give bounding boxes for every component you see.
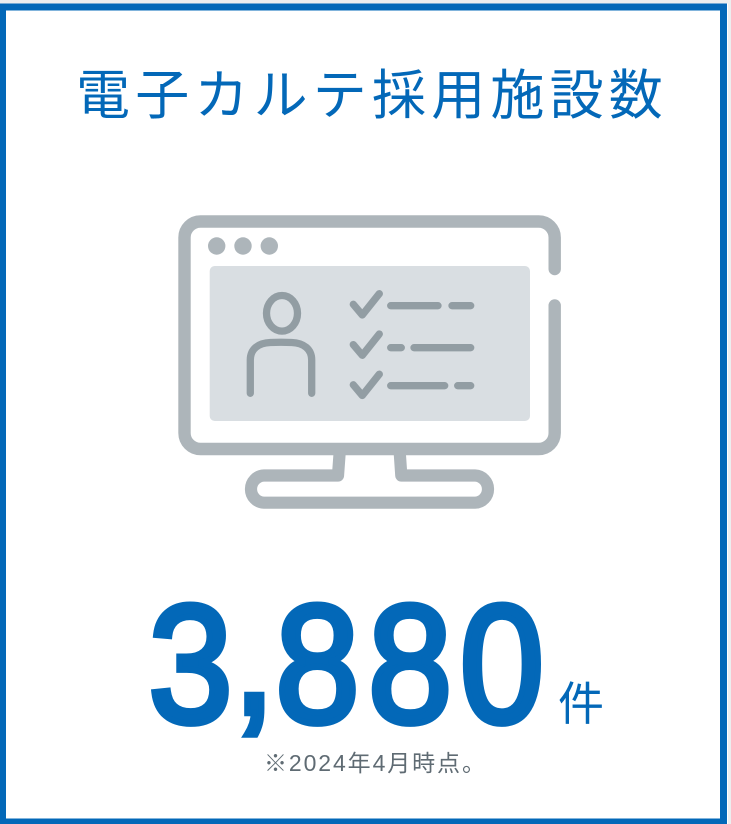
screen panel (210, 266, 530, 421)
icon: person (250, 296, 312, 393)
icon: computer monitor with patient record (184, 222, 555, 503)
unit: 件 (558, 678, 604, 730)
monitor frame (184, 222, 555, 449)
title: 電子カルテ採用施設数 (76, 66, 668, 126)
big number: 3,880 (149, 561, 544, 758)
monitor stand (251, 452, 488, 503)
footnote: ※2024年4月時点。 (264, 750, 487, 776)
window dots (208, 237, 278, 255)
checklist (353, 294, 471, 396)
